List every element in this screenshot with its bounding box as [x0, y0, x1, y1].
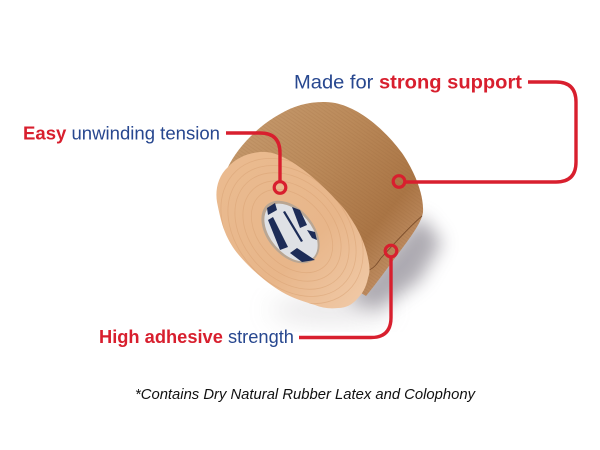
tape front face: [216, 152, 370, 308]
leader line: [226, 133, 280, 181]
marker: [385, 245, 397, 257]
tape roll: [216, 102, 424, 308]
core branding: [267, 203, 317, 262]
core hole: [250, 190, 331, 274]
tape edge seam: [369, 216, 422, 270]
tape weave texture: [228, 102, 423, 296]
leader line: [299, 257, 391, 338]
callout: strong support: [294, 72, 576, 187]
marker: [393, 176, 405, 187]
tape outer side: [228, 102, 423, 296]
marker: [274, 182, 286, 193]
cast shadow: [270, 215, 442, 320]
leader line: [405, 82, 576, 182]
footnote: *Contains Dry Natural Rubber Latex and Colophony: [135, 387, 476, 403]
label: High adhesive strength: [99, 326, 294, 347]
label: Made for strong support: [294, 72, 523, 94]
label: Easy unwinding tension: [23, 122, 220, 144]
wound layers: [220, 158, 364, 304]
callout: high adhesive strength: [99, 245, 397, 347]
callout: easy unwinding tension: [23, 122, 286, 193]
